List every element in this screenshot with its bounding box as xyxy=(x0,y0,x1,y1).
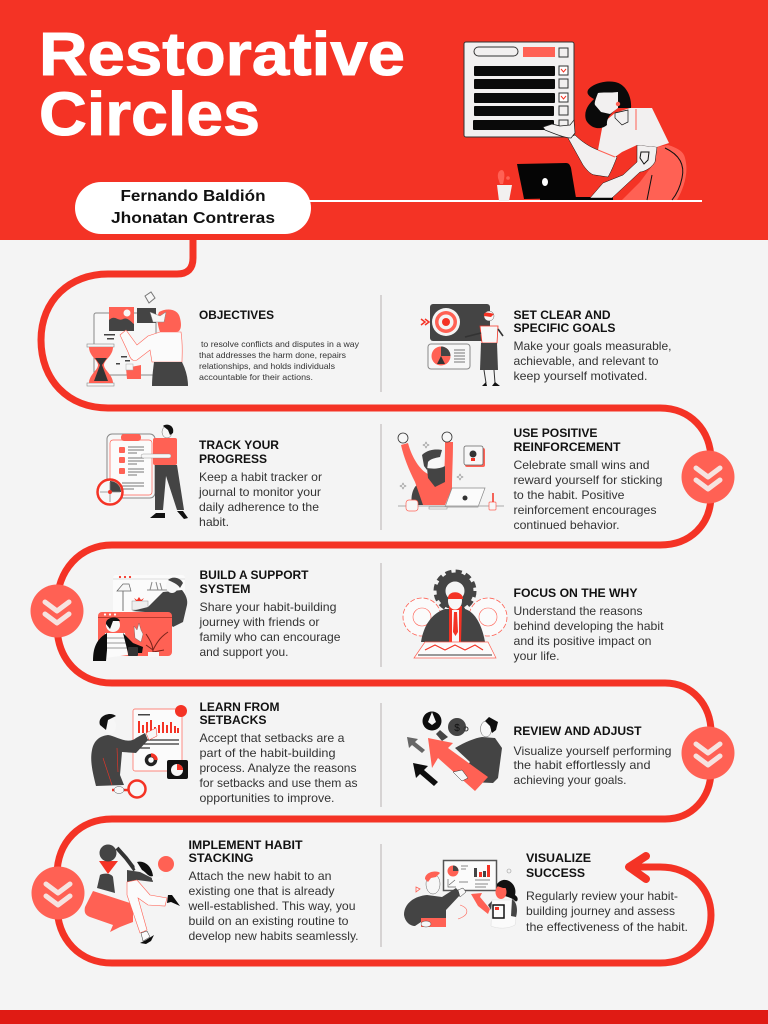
author pill: Jhonatan Contreras xyxy=(111,210,275,227)
body text xyxy=(514,605,664,663)
panel: review and adjust xyxy=(407,712,672,791)
body text: habit. xyxy=(199,516,229,529)
body text: and support you. xyxy=(200,646,288,659)
panel: learn from setbacks xyxy=(91,700,358,805)
body text: Accept that setbacks are a xyxy=(200,732,345,745)
bottom bar xyxy=(0,1010,768,1024)
body text: to resolve conflicts and disputes in a way xyxy=(201,339,360,349)
body text: process. Analyze the reasons xyxy=(200,762,357,775)
badge: chevron right 1 xyxy=(682,450,734,504)
body text: reward yourself for sticking xyxy=(514,474,662,487)
body text: reinforcement encourages xyxy=(514,504,657,517)
heading: REVIEW AND ADJUST xyxy=(514,724,642,738)
body text xyxy=(198,471,322,529)
icon: objectives xyxy=(87,292,188,386)
body text: the effectiveness of the habit. xyxy=(526,921,688,934)
arrow head xyxy=(629,856,646,879)
badge: chevron left 1 xyxy=(30,584,84,638)
body text: Make your goals measurable, xyxy=(514,340,672,353)
heading: SETBACKS xyxy=(200,713,266,727)
body text: Visualize yourself performing xyxy=(514,745,672,758)
heading: IMPLEMENT HABIT xyxy=(188,838,303,852)
body text: Celebrate small wins and xyxy=(514,459,650,472)
title: Restorative xyxy=(39,20,405,88)
body text xyxy=(199,339,360,382)
badge: chevron left 2 xyxy=(32,866,84,920)
body text: to the habit. Positive xyxy=(514,489,624,502)
heading: TRACK YOUR xyxy=(199,438,279,452)
panel: support system xyxy=(93,568,340,661)
panel: habit stacking xyxy=(85,838,359,944)
panel: track your progress xyxy=(98,425,322,529)
heading: SET CLEAR AND xyxy=(514,308,611,322)
body text xyxy=(200,732,358,805)
body text: build on an existing routine to xyxy=(188,915,348,928)
body text: Attach the new habit to an xyxy=(188,870,332,883)
heading: SUCCESS xyxy=(526,866,585,880)
icon: woman stacking shapes xyxy=(85,844,180,944)
body text: continued behavior. xyxy=(514,519,620,532)
illustration: woman with checklist xyxy=(464,42,686,201)
body text xyxy=(198,601,340,659)
icon: two people and board xyxy=(404,860,518,928)
heading: SPECIFIC GOALS xyxy=(514,321,616,335)
body text: the habit effortlessly and xyxy=(514,759,650,772)
icon: arrows and man: $ xyxy=(454,723,460,734)
body text: behind developing the habit xyxy=(514,620,664,633)
body text: relationships, and holds individuals xyxy=(199,361,335,371)
body text xyxy=(514,340,672,383)
heading: LEARN FROM xyxy=(200,700,280,714)
heading: OBJECTIVES xyxy=(199,308,274,322)
body text: Regularly review your habit- xyxy=(526,890,678,903)
body text: Understand the reasons xyxy=(514,605,643,618)
connector path xyxy=(41,236,711,963)
body text: well-established. This way, you xyxy=(187,900,356,913)
icon: gears and thinker xyxy=(403,572,507,658)
body text xyxy=(514,459,662,532)
icon: clipboard person xyxy=(98,425,188,519)
heading xyxy=(199,438,279,466)
body text: daily adherence to the xyxy=(199,501,319,514)
badge: chevron right 2 xyxy=(682,726,734,780)
body text: for setbacks and use them as xyxy=(200,777,358,790)
title: Circles xyxy=(39,80,260,148)
body text: that addresses the harm done, repairs xyxy=(199,350,346,360)
panel: visualize success xyxy=(404,851,688,934)
body text: achievable, and relevant to xyxy=(514,355,658,368)
heading: VISUALIZE xyxy=(526,851,591,865)
heading: STACKING xyxy=(188,851,254,865)
icon: celebrating man xyxy=(398,432,504,511)
icon: video call xyxy=(93,575,187,661)
icon: target board xyxy=(421,304,503,386)
panel: objectives xyxy=(87,292,360,386)
heading xyxy=(514,308,616,335)
body text: and its positive impact on xyxy=(514,635,652,648)
heading: PROGRESS xyxy=(199,452,267,466)
body text: part of the habit-building xyxy=(200,747,336,760)
heading: REINFORCEMENT xyxy=(514,440,621,454)
header banner xyxy=(0,0,768,240)
body text: develop new habits seamlessly. xyxy=(188,930,358,943)
body text: achieving your goals. xyxy=(514,774,626,787)
author pill: Fernando Baldión xyxy=(120,188,266,205)
heading xyxy=(200,700,280,727)
body text: your life. xyxy=(514,650,560,663)
body text: family who can encourage xyxy=(200,631,340,644)
body text: keep yourself motivated. xyxy=(514,370,648,383)
panel: positive reinforcement xyxy=(398,426,662,532)
icon: man with chart xyxy=(91,705,188,798)
title xyxy=(39,20,405,148)
heading: BUILD A SUPPORT xyxy=(200,568,309,582)
heading xyxy=(514,426,621,454)
panel: focus on the why xyxy=(403,572,664,663)
body text: opportunities to improve. xyxy=(200,792,334,805)
heading xyxy=(526,851,591,880)
body text: accountable for their actions. xyxy=(199,372,313,382)
author pill xyxy=(75,182,311,234)
body text: building journey and assess xyxy=(526,905,675,918)
icon: arrows and man xyxy=(407,712,502,791)
body text xyxy=(187,870,358,943)
body text: Keep a habit tracker or xyxy=(199,471,322,484)
desk line xyxy=(305,200,702,202)
panel: set clear goals xyxy=(421,304,672,386)
body text xyxy=(514,745,672,787)
body text xyxy=(526,890,688,934)
heading: USE POSITIVE xyxy=(514,426,598,440)
body text: Share your habit-building xyxy=(200,601,336,614)
body text: journal to monitor your xyxy=(198,486,321,499)
dividers xyxy=(380,295,382,947)
heading: FOCUS ON THE WHY xyxy=(514,586,638,600)
heading xyxy=(200,568,309,596)
body text: journey with friends or xyxy=(198,616,320,629)
body text: existing one that is already xyxy=(188,885,335,898)
heading: SYSTEM xyxy=(200,582,250,596)
heading xyxy=(188,838,303,865)
